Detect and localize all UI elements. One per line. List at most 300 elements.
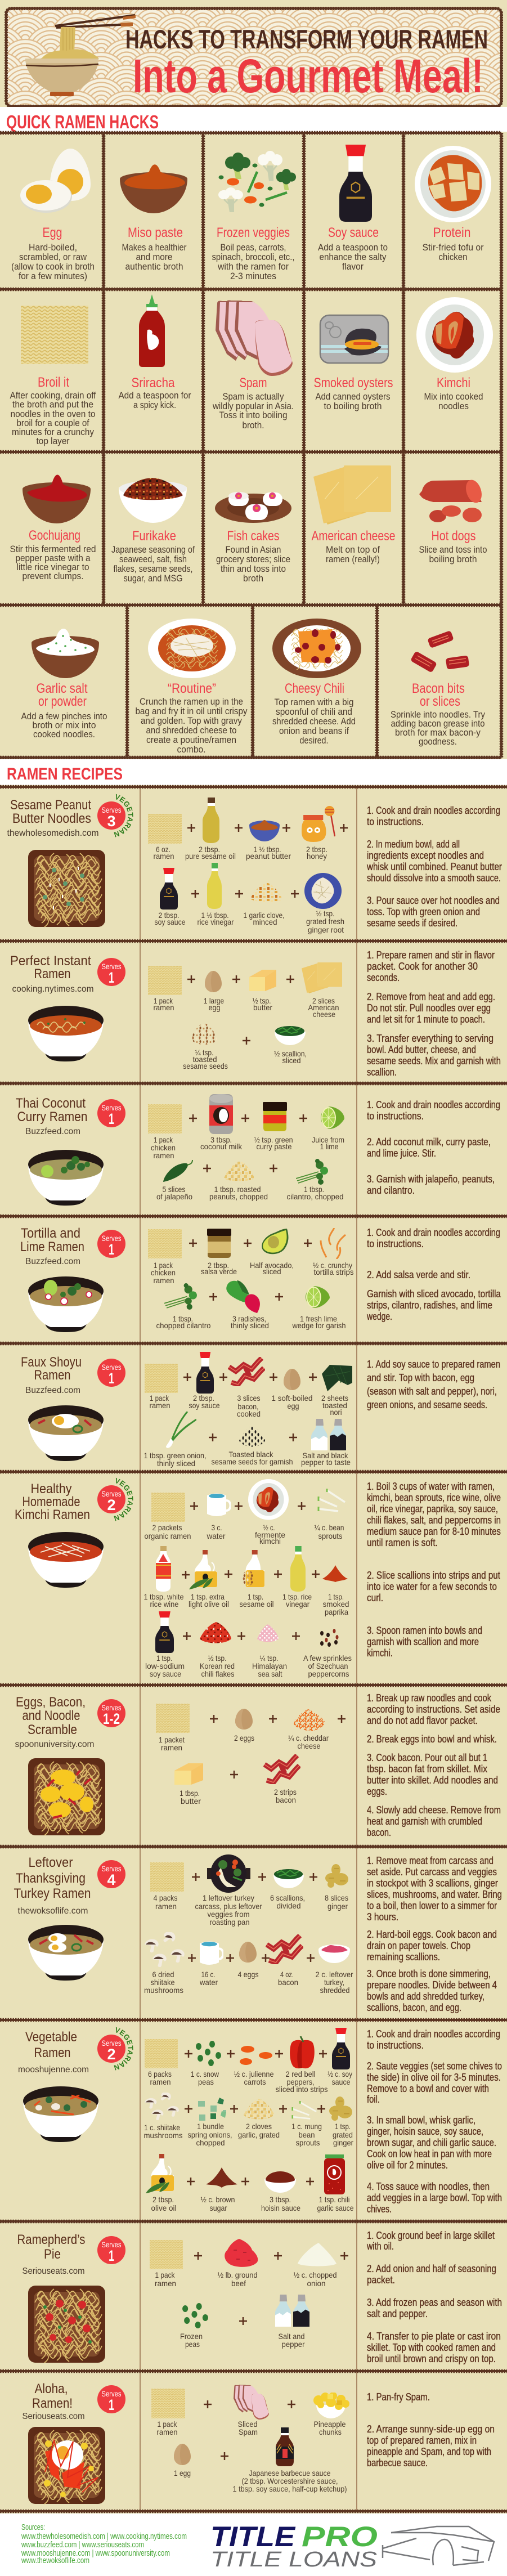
heading: routine: “Routine” — [168, 681, 216, 696]
recipe title — [10, 953, 91, 982]
recipe steps: to instructions. — [367, 1110, 424, 1122]
ingredient: ramen: ramen — [153, 852, 174, 861]
recipe steps: barbecue sauce. — [367, 2457, 428, 2469]
recipe title: Lime Ramen — [20, 1239, 84, 1255]
source url: Seriouseats.com — [23, 2412, 84, 2421]
text: furikake description: sugar, and MSG — [124, 574, 182, 584]
recipe title — [32, 2381, 73, 2411]
ingredient: salt and pepper: Salt and black — [303, 1451, 348, 1460]
recipe title — [17, 2232, 86, 2262]
recipe steps: scallion. — [367, 1067, 397, 1078]
white band: recipes heading — [0, 759, 507, 785]
recipe steps — [366, 2230, 502, 2364]
serves badge: 1 — [109, 969, 114, 986]
hack: bacon bits — [391, 630, 486, 747]
ingredient: scallions: divided — [277, 1901, 300, 1910]
text: egg description — [11, 243, 95, 281]
serves badge: 1 — [109, 1110, 114, 1127]
ingredient: coconut milk: 3 tbsp. — [210, 1135, 232, 1144]
heading: garlic salt or powder: Garlic salt — [36, 681, 88, 696]
heading: kimchi: Kimchi — [437, 375, 470, 391]
ingredient: egg — [204, 971, 224, 1012]
ingredient: spring onions — [188, 2098, 232, 2147]
heading: soy sauce: Soy sauce — [328, 225, 379, 240]
ingredient: black sesame seeds — [212, 1426, 293, 1466]
icon: oyster tin — [320, 315, 388, 363]
ingredient: sesame seeds: ¼ tsp. — [195, 1048, 214, 1057]
text: broil description: noodles in the oven to — [10, 409, 96, 419]
recipe title: Kimchi Ramen — [15, 1507, 90, 1522]
ingredient: japanese barbecue sauce: 1 tbsp. soy sauce, half-cup ketchup) — [233, 2484, 347, 2493]
recipe steps: garnish with scallion and more — [367, 1636, 479, 1647]
icon: eggs — [20, 149, 91, 213]
ingredient: american cheese — [302, 962, 342, 1019]
recipe steps: until ramen is soft. — [367, 1537, 438, 1548]
ingredient: bean sprouts — [314, 1489, 345, 1540]
source url: Seriouseats.com — [23, 2266, 84, 2276]
serves badge — [97, 1099, 125, 1127]
ingredient: garlic — [243, 882, 285, 926]
icon: poutine ramen plate — [148, 619, 236, 678]
source url: mooshujenne.com — [18, 2065, 89, 2075]
ingredient: leftover turkey — [315, 1945, 353, 1995]
ingredient: bacon — [267, 1936, 302, 1987]
recipe title — [20, 1226, 84, 1255]
serves badge: 1 — [109, 2396, 114, 2413]
heading: frozen veggies: Frozen veggies — [217, 225, 290, 240]
icon: ramen bowl with eggs and bacon — [28, 1925, 104, 1981]
ingredient: chili flakes: ½ tsp. — [208, 1654, 226, 1663]
icon: cheese slices — [313, 465, 391, 525]
ingredient: lime wedge — [292, 1286, 346, 1330]
ingredient: turkey carcass: 1 leftover turkey — [203, 1893, 254, 1902]
sources list: Sources: — [21, 2523, 45, 2532]
ingredient: white rice wine: 1 tbsp. white — [144, 1592, 184, 1601]
ingredient: turkey carcass — [195, 1854, 262, 1927]
ingredient: japanese barbecue sauce — [233, 2427, 347, 2493]
ingredient: tortilla strips: tortilla strips — [314, 1267, 353, 1276]
text: protein description: Stir-fried tofu or — [422, 243, 484, 253]
ingredient: sesame oil: pure sesame oil — [185, 852, 236, 861]
ingredient: ramen: 6 packs — [148, 2069, 172, 2078]
ingredient: honey — [302, 806, 335, 861]
recipe steps: 1. Pan-fry Spam. — [367, 2391, 430, 2403]
icon: hot dog sausage — [419, 478, 484, 522]
ingredient: salt and pepper: Salt and — [278, 2332, 305, 2341]
ingredient: jalapeno — [156, 1160, 192, 1201]
recipe title: Vegetable — [25, 2030, 77, 2045]
icon: ramen bowl with vegetables — [23, 2086, 98, 2142]
ingredient: chopped onion: ½ c. chopped — [294, 2270, 336, 2279]
heading: broil it: Broil it — [38, 375, 69, 390]
ingredient: avocado: sliced — [262, 1267, 281, 1276]
ingredient: bacon: bacon — [278, 1978, 298, 1987]
ingredient: soy sauce: ½ c. soy — [327, 2069, 352, 2078]
icon: garlic salt bowl — [32, 629, 99, 678]
ingredient: ginger: 8 slices — [325, 1893, 348, 1902]
recipe steps — [366, 805, 502, 929]
ingredient: mung bean sprouts: sprouts — [296, 2138, 320, 2147]
hack: cheesy chili — [272, 619, 361, 746]
ingredient: julienne carrots — [234, 2046, 274, 2086]
ingredient: kimchi: ½ c. — [263, 1523, 275, 1532]
ingredient: turkey carcass: carcass, plus leftover — [195, 1902, 262, 1911]
recipe title: Homemade — [23, 1494, 80, 1509]
icon: gochujang bowl — [23, 475, 91, 523]
serves badge — [97, 958, 125, 986]
text: furikake description — [111, 545, 195, 584]
text: garlic description — [21, 711, 107, 740]
icon: miso bowl — [120, 164, 187, 213]
ingredient: brown sugar: ½ c. brown — [200, 2195, 235, 2204]
ingredient: ramen: 1 pack — [158, 2420, 177, 2429]
ingredient: scallions — [270, 1869, 305, 1910]
sources list: www.buzzfeed.com | www.seriouseats.com — [21, 2540, 144, 2550]
heading: cheesy chili: Cheesy Chili — [285, 681, 344, 696]
ingredient: soy sauce — [154, 868, 186, 926]
ingredient: salsa verde: salsa verde — [201, 1267, 237, 1276]
ingredient: shiitake mushrooms — [144, 2092, 182, 2140]
heading: bacon bits or slices: or slices — [420, 694, 460, 709]
ingredient: scallion — [274, 1026, 307, 1065]
recipe title: Perfect Instant — [10, 953, 91, 969]
ingredient: salsa verde: 2 tbsp. — [208, 1261, 229, 1270]
icon: ramen bowl with kimchi broth — [28, 1532, 104, 1588]
hack: american cheese — [312, 465, 395, 565]
serves badge: Serves — [101, 1103, 122, 1112]
hack: hot dogs — [419, 478, 487, 565]
serves badge — [97, 1359, 125, 1387]
recipe: leftover thanksgiving turkey ramen — [14, 1854, 502, 2013]
recipe steps: with oil. — [366, 2241, 394, 2252]
text: gochujang description: prevent clumps. — [23, 571, 83, 581]
recipe steps: ingredients except noodles and — [367, 850, 484, 861]
text: cheesy chili description: onion and beans if — [279, 726, 349, 736]
ingredient: japanese barbecue sauce: (2 tbsp. Worcestershire sauce, — [242, 2476, 338, 2485]
ingredient: water: water — [199, 1978, 218, 1987]
ingredient: lime wedge: 1 fresh lime — [300, 1314, 337, 1323]
ingredient: cilantro — [156, 1283, 211, 1330]
ingredient: chicken ramen: 1 pack — [154, 1261, 173, 1270]
ingredient: garlic: minced — [253, 917, 277, 926]
ingredient: coconut milk — [200, 1094, 243, 1151]
logo: title pro title loans: PRO — [302, 2521, 378, 2552]
ingredient: shiitake mushrooms: mushrooms — [144, 1986, 183, 1995]
ingredient: low-sodium soy sauce: 1 tsp. — [156, 1654, 172, 1663]
source url: Buzzfeed.com — [25, 1127, 80, 1136]
ingredient: olive oil — [189, 1550, 229, 1609]
ingredient: red bell peppers: peppers, — [287, 2077, 314, 2086]
ingredient: ramen: 1 pack — [154, 996, 173, 1005]
recipe steps: and lime juice. Stir. — [367, 1148, 436, 1159]
serves badge with vegetarian arc: VEGETARIAN — [114, 2027, 133, 2070]
recipe table lines — [0, 787, 507, 2511]
ingredient: chicken ramen: chicken — [151, 1268, 176, 1277]
ingredient: red bell peppers — [276, 2036, 327, 2094]
ingredient: bacon: 4 oz. — [280, 1970, 294, 1979]
recipe: thai coconut curry ramen — [16, 1094, 500, 1206]
heading: garlic salt or powder: or powder — [38, 694, 87, 709]
ingredient: turkey carcass: roasting pan — [209, 1918, 250, 1927]
text: oysters description: Add canned oysters — [315, 392, 391, 402]
source url: thewoksoflife.com — [18, 1906, 88, 1916]
text: furikake description: flakes, sesame seeds, — [114, 564, 192, 574]
text: routine description — [135, 697, 248, 755]
recipe title: Leftover — [28, 1855, 73, 1870]
recipe steps: ginger, hoisin sauce, soy sauce, — [367, 2126, 483, 2137]
source url: Buzzfeed.com — [25, 1257, 80, 1266]
icon: sriracha bottle — [139, 294, 165, 367]
ingredient: shiitake mushrooms — [144, 1932, 185, 1995]
ingredient: american cheese: 2 slices — [312, 996, 335, 1005]
text: spam description: Toss it into boiling — [219, 410, 287, 420]
ingredient: spring onions: spring onions, — [188, 2130, 232, 2139]
hack: fish cakes — [215, 492, 291, 584]
ingredient: lime: Juice from — [312, 1135, 344, 1144]
recipe title: Ramen — [34, 966, 71, 982]
recipe steps: wedge. — [366, 1311, 392, 1322]
ingredient: bacon: 2 strips — [274, 1787, 297, 1797]
recipe: sesame peanut butter noodles — [7, 794, 502, 934]
recipe title: Butter Noodles — [12, 811, 91, 826]
text: veggies description: Boil peas, carrots, — [221, 243, 286, 253]
text: egg description: (allow to cook in broth — [11, 262, 95, 272]
source url: cooking.nytimes.com — [12, 984, 93, 994]
serves badge: 1-2 — [103, 1710, 120, 1727]
ingredient: low-sodium soy sauce — [145, 1611, 185, 1678]
ingredient: hoisin sauce: 3 tbsp. — [270, 2195, 291, 2204]
heading: quick ramen hacks: QUICK RAMEN HACKS — [6, 111, 159, 132]
ingredient: salt and pepper — [301, 1419, 351, 1467]
ingredient: snow peas — [191, 2041, 221, 2086]
ingredient: chili garlic sauce — [317, 2154, 354, 2212]
ingredient: egg — [174, 2444, 191, 2478]
plus signs — [189, 1239, 312, 1301]
heading: garlic salt or powder — [36, 681, 88, 709]
text: egg description: Hard-boiled, — [29, 243, 77, 253]
recipe title: Sesame Peanut — [10, 798, 91, 813]
serves badge with vegetarian arc: VEGETARIAN — [114, 794, 133, 837]
text: furikake description: Japanese seasoning of — [111, 545, 195, 555]
ingredient: ramen: ramen — [153, 1003, 174, 1012]
recipe steps — [367, 949, 501, 1078]
recipe title: Thanksgiving — [16, 1871, 86, 1886]
icon: fish cakes plate — [215, 492, 291, 523]
recipe: healthy homemade kimchi ramen — [15, 1478, 501, 1678]
text: fish cakes description: Found in Asian — [225, 545, 281, 555]
ingredient: scallion: sliced — [282, 1056, 300, 1065]
text: garlic description: Add a few pinches into — [21, 711, 107, 722]
ingredient: garlic: 1 garlic clove, — [243, 911, 285, 920]
text: cheesy chili description: Top ramen with a big — [275, 697, 353, 707]
ingredient: kimchi: kimchi — [259, 1536, 281, 1545]
ingredient: olive oil: olive oil — [151, 2203, 177, 2212]
serves badge: Serves — [101, 962, 122, 971]
ingredient: julienne carrots: carrots — [244, 2077, 266, 2086]
ingredient: cheddar cheese: ¼ c. cheddar — [288, 1733, 329, 1742]
ingredient: bacon — [229, 1358, 264, 1418]
ingredient: pineapple — [313, 2392, 349, 2436]
text: broil description: broil for a couple of — [17, 418, 89, 428]
recipe steps — [367, 1692, 501, 1838]
ingredient: lime: 1 lime — [320, 1142, 339, 1151]
recipe title — [16, 1096, 88, 1125]
ingredient: nori: 2 sheets — [321, 1394, 348, 1403]
ingredient: chili flakes: chili flakes — [201, 1669, 234, 1678]
ingredient: radishes: thinly sliced — [231, 1321, 269, 1330]
icon: ramepherd's pie tray — [28, 2286, 105, 2363]
text: routine description: Crunch the ramen up in the — [140, 697, 243, 707]
icon: car outline — [383, 2526, 494, 2565]
ingredient: bacon: cooked — [237, 1409, 261, 1418]
logo: title pro title loans — [210, 2521, 378, 2571]
heading: smoked oysters: Smoked oysters — [314, 375, 393, 391]
ingredient: ground beef — [217, 2239, 258, 2288]
ingredient: peanuts: 1 tbsp. roasted — [214, 1185, 261, 1194]
serves badge — [97, 2236, 125, 2264]
ingredient: ramen — [148, 814, 182, 861]
ingredient: grated ginger: grated — [333, 2130, 353, 2139]
source url: Buzzfeed.com — [25, 1386, 80, 1395]
ingredient: rice vinegar: 1 ½ tbsp. — [201, 911, 228, 920]
ingredient: organic ramen: organic ramen — [144, 1531, 191, 1540]
logo: title pro title loans: TITLE LOANS — [210, 2548, 377, 2571]
text: oysters description: to boiling broth — [324, 401, 382, 411]
ingredient: grated ginger: 1 tsp. — [335, 2122, 351, 2131]
ingredient: ramen — [150, 1862, 184, 1911]
plus signs — [182, 1502, 320, 1640]
recipe: vegetable ramen — [18, 2027, 502, 2215]
recipe steps: salt and pepper. — [367, 2308, 428, 2319]
ingredient: shiitake mushrooms: 1 c. shiitake — [144, 2123, 180, 2132]
icon: bacon bits — [410, 630, 469, 673]
ingredient: bacon: 3 slices — [237, 1394, 260, 1403]
text: oysters description — [315, 392, 391, 411]
recipe steps: drain on paper towels. Chop — [367, 1940, 470, 1951]
heading: protein: Protein — [433, 225, 470, 240]
ingredient: green onion: thinly sliced — [157, 1459, 195, 1468]
ingredient: sesame oil — [185, 798, 236, 861]
ingredient: ramen: ramen — [155, 1902, 177, 1911]
ingredient: leftover turkey: turkey, — [324, 1978, 344, 1987]
recipe steps — [367, 2391, 495, 2469]
ingredient: green onion — [144, 1412, 206, 1468]
ingredient: szechuan peppercorns: of Szechuan — [308, 1661, 348, 1670]
ingredient: peanut butter: 1 ½ tbsp. — [253, 845, 281, 854]
recipe title: Aloha, — [35, 2381, 68, 2396]
icon: kimchi plate — [416, 297, 493, 373]
text: veggies description: 2-3 minutes — [230, 271, 276, 281]
plus signs — [185, 2050, 327, 2185]
serves badge: Serves — [101, 2389, 122, 2398]
ingredient: low-sodium soy sauce: low-sodium — [145, 1661, 185, 1670]
icon: aloha ramen tray — [28, 2427, 105, 2504]
ingredient: cilantro — [287, 1159, 343, 1201]
ingredient: ramen: ramen — [150, 1401, 170, 1410]
text: kimchi description: noodles — [438, 401, 469, 411]
text: fish cakes description: thin and toss into — [221, 564, 286, 574]
recipe steps: bowls and add shredded turkey, — [367, 1991, 484, 2002]
ingredient: white rice wine — [144, 1546, 184, 1609]
text: routine description: bag and fry it in oil until crispy — [135, 706, 248, 716]
recipe: eggs, bacon, and noodle scramble — [15, 1692, 501, 1838]
ingredient: chicken ramen: 1 pack — [154, 1135, 173, 1144]
ingredient: cheddar cheese: cheese — [297, 1741, 321, 1750]
ingredient: grated garlic — [238, 2099, 280, 2139]
recipe steps: and do not add flavor packet. — [367, 1715, 478, 1726]
icon: tofu plate — [415, 146, 491, 222]
ingredient: egg — [271, 1369, 313, 1410]
ingredient: grated ginger — [329, 2096, 353, 2147]
hack: furikake — [111, 478, 195, 584]
text: egg description: scrambled, or raw — [19, 252, 87, 262]
text: spam description: Spam is actually — [223, 392, 284, 402]
ingredient: organic ramen — [144, 1493, 191, 1540]
ingredient: ramen — [148, 966, 182, 1012]
recipe steps — [367, 1855, 502, 2013]
text: protein description — [422, 243, 484, 262]
text: veggies description: with the ramen for — [217, 262, 289, 272]
ingredient: tortilla strips — [313, 1228, 353, 1276]
ingredient: smoked paprika: paprika — [325, 1607, 348, 1616]
ingredient: ginger root — [304, 873, 344, 934]
ingredient: rice vinegar: rice vinegar — [197, 917, 234, 926]
footer — [0, 2514, 507, 2576]
text: cheese description: ramen (really!) — [326, 554, 380, 565]
ingredient: butter: butter — [253, 1003, 272, 1012]
ingredient: soy sauce: 2 tbsp. — [193, 1394, 214, 1403]
ingredient: himalayan sea salt: ¼ tsp. — [260, 1654, 278, 1663]
ingredient: smoked paprika — [322, 1565, 349, 1616]
ingredient: ramen — [151, 2389, 185, 2436]
text: broil description — [10, 391, 96, 446]
ingredient: cilantro: cilantro, chopped — [287, 1192, 343, 1201]
ingredient: chicken ramen: ramen — [153, 1151, 174, 1160]
serves badge: Serves — [101, 1864, 122, 1873]
recipe steps: seconds. — [367, 972, 400, 983]
text: hot dogs description — [419, 545, 487, 565]
text: sriracha description: a spicy kick. — [133, 400, 176, 410]
serves badge: Serves — [101, 1363, 122, 1372]
ingredient: grated garlic: 2 cloves — [246, 2122, 272, 2131]
ingredient: szechuan peppercorns: peppercorns — [308, 1669, 349, 1678]
hack: garlic salt — [21, 629, 107, 740]
hack: protein — [415, 146, 491, 262]
ingredient: salsa verde — [201, 1229, 237, 1276]
ingredient: cheddar cheese — [288, 1709, 329, 1750]
hack: smoked oysters — [314, 315, 393, 411]
icon: ramen bowl with lime and radish — [28, 1276, 104, 1332]
ingredient: salt and pepper: pepper — [281, 2340, 305, 2349]
ingredient: cilantro: 1 tbsp. — [173, 1314, 193, 1323]
ingredient: mung bean sprouts: bean — [298, 2130, 315, 2139]
recipe steps: eggs. — [367, 1786, 387, 1797]
recipe steps: 2. In medium bowl, add all — [367, 839, 460, 850]
recipe steps: to instructions. — [367, 2040, 424, 2051]
ingredient: peanuts — [209, 1161, 268, 1201]
ingredient: egg: 1 large — [204, 996, 224, 1005]
plus signs — [204, 2400, 295, 2460]
hack: gochujang — [10, 475, 96, 581]
text: bacon description: broth for max bacon-y — [395, 728, 481, 738]
ingredient: hoisin sauce: hoisin sauce — [261, 2203, 300, 2212]
ingredient: chili garlic sauce: garlic sauce — [317, 2203, 354, 2212]
heading: bacon bits or slices — [412, 681, 465, 709]
ingredient: ground beef: ½ lb. ground — [217, 2270, 258, 2279]
ingredient: chicken ramen: chicken — [151, 1143, 176, 1152]
text: cheesy chili description — [272, 697, 356, 746]
heading: egg: Egg — [43, 225, 62, 240]
